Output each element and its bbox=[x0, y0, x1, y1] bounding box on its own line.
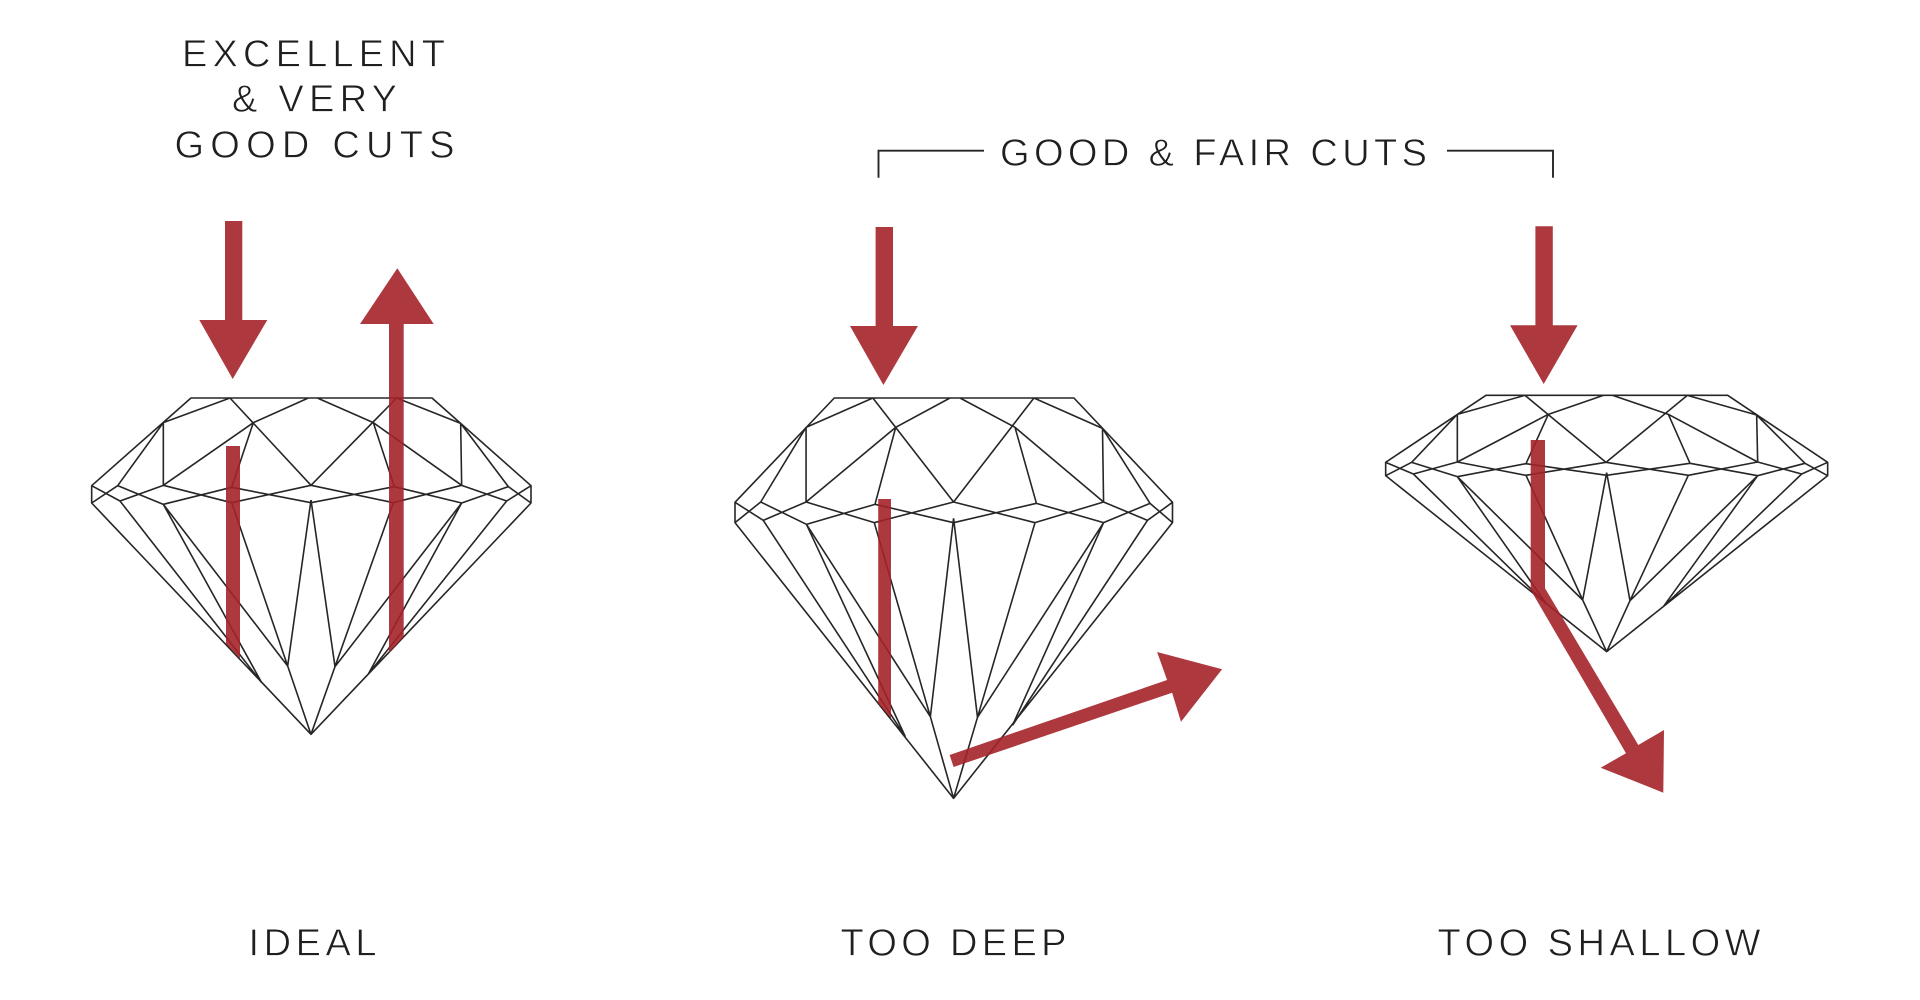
arrow: internal light path down bbox=[878, 499, 891, 718]
arrow: light leaking out bottom bbox=[1531, 440, 1664, 793]
heading: excellent and very good cuts: EXCELLENT bbox=[182, 34, 445, 76]
heading: excellent and very good cuts bbox=[174, 34, 454, 166]
wireframe: too shallow cut bbox=[1386, 395, 1828, 652]
panel: too shallow diamond bbox=[1386, 226, 1828, 793]
arrow: light entering bbox=[199, 221, 267, 379]
arrow: light leaking out side bbox=[950, 652, 1222, 767]
panel: ideal diamond bbox=[92, 221, 531, 734]
panel: too deep diamond bbox=[735, 227, 1222, 798]
arrow: light entering bbox=[850, 227, 918, 385]
label: ideal: IDEAL bbox=[248, 923, 376, 965]
wireframe: too deep cut bbox=[735, 398, 1172, 798]
heading: good and fair cuts with bracket: GOOD & FAIR CUTS bbox=[1000, 133, 1427, 175]
heading: excellent and very good cuts: GOOD CUTS bbox=[174, 124, 454, 166]
label: too deep: TOO DEEP bbox=[840, 923, 1066, 965]
heading: good and fair cuts with bracket bbox=[878, 133, 1553, 178]
label: too shallow: TOO SHALLOW bbox=[1438, 923, 1761, 965]
arrow: light entering bbox=[1510, 226, 1578, 384]
arrow: light returning upward bbox=[360, 268, 434, 653]
arrow: internal light path down bbox=[226, 446, 240, 658]
wireframe: ideal cut bbox=[92, 398, 531, 734]
heading: excellent and very good cuts: & VERY bbox=[232, 79, 397, 121]
